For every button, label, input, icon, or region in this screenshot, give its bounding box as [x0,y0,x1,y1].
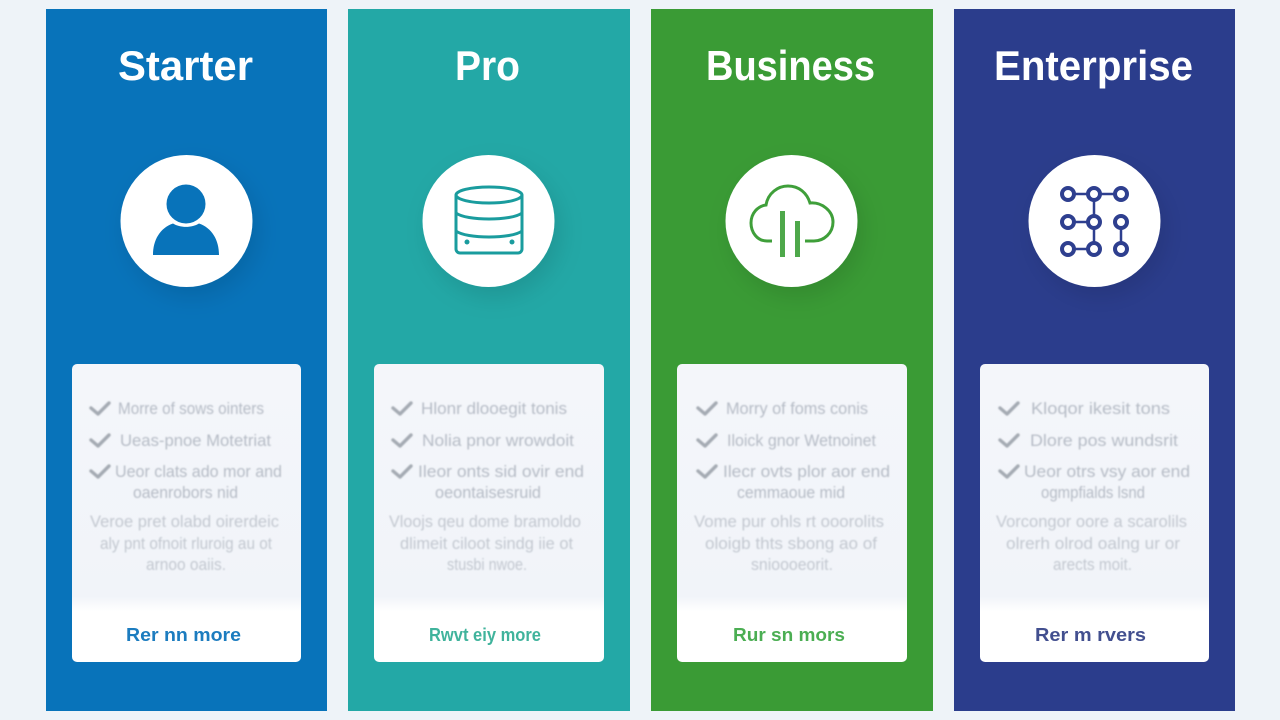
panel: Starter plan [46,9,327,711]
description: dlimeit ciloot sindg iie ot [400,534,573,553]
icon: person [120,155,252,287]
feature list: ogmpfialds lsnd [1041,483,1145,502]
feature list: Dlore pos wundsrit [1030,431,1178,450]
feature list [393,399,584,502]
feature list: Kloqor ikesit tons [1031,399,1170,418]
description: stusbi nwoe. [447,555,527,574]
feature card [374,364,604,662]
feature list [1000,399,1190,502]
heading: Starter: Starter [118,42,253,89]
feature list: Ueor otrs vsy aor end [1024,462,1190,481]
icon: database [422,155,554,287]
description: Vloojs qeu dome bramoldo [389,512,581,531]
feature list [698,399,890,502]
button: learn more: Rur sn mors [733,625,845,645]
description: olrerh olrod oalng ur or [1006,534,1180,553]
heading: Enterprise: Enterprise [994,42,1193,89]
feature list: oaenrobors nid [133,483,238,502]
panel: Pro plan [348,9,630,711]
feature list: Morry of foms conis [726,399,868,418]
heading: Business: Business [706,42,875,89]
description [90,512,279,574]
feature list: cemmaoue mid [737,483,845,502]
button: learn more: Rer nn more [126,625,241,645]
description [389,512,581,574]
feature list: Ueor clats ado mor and [115,462,282,481]
description: Veroe pret olabd oirerdeic [90,512,279,531]
icon: network nodes [1028,155,1160,287]
feature card [677,364,907,662]
button: learn more: Rer m rvers [1035,625,1146,645]
description: oloigb thts sbong ao of [705,534,877,553]
description: aly pnt ofnoit rluroig au ot [100,534,272,553]
panel: Business plan [651,9,933,711]
description [694,512,884,574]
heading: Pro: Pro [455,42,520,89]
feature list: Ilecr ovts plor aor end [723,462,890,481]
panel: Enterprise plan [954,9,1235,711]
description: snioooeorit. [751,555,833,574]
feature card [72,364,301,662]
button: learn more: Rwvt eiy more [429,625,541,645]
feature list: Iloick gnor Wetnoinet [727,431,876,450]
feature card [980,364,1209,662]
feature list: Hlonr dlooegit tonis [421,399,567,418]
feature list: Morre of sows ointers [118,399,264,418]
description: arects moit. [1053,555,1132,574]
description: Vome pur ohls rt ooorolits [694,512,884,531]
feature list: oeontaisesruid [435,483,541,502]
feature list [91,399,282,502]
feature list: Nolia pnor wrowdoit [422,431,574,450]
description: arnoo oaiis. [146,555,226,574]
description: Vorcongor oore a scarolils [996,512,1187,531]
description [996,512,1187,574]
feature list: Ueas-pnoe Motetriat [120,431,271,450]
feature list: Ileor onts sid ovir end [418,462,584,481]
icon: cloud [726,155,858,287]
